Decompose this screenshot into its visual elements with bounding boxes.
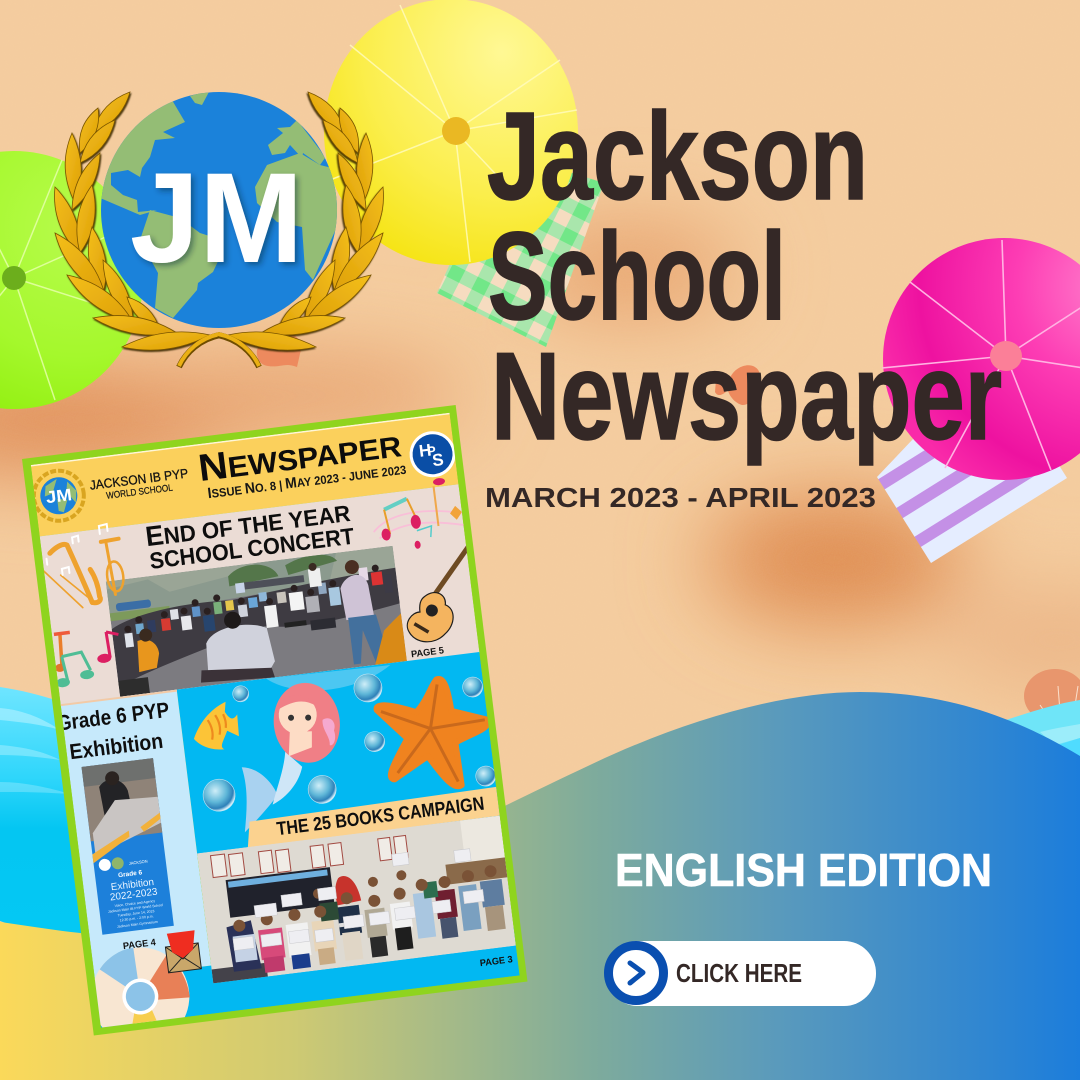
gradient wave: blue to yellow (0, 692, 1080, 1080)
flyer: 2022-2023 (109, 887, 159, 903)
title (487, 88, 1002, 466)
logo initials: JM (130, 147, 303, 290)
globe (100, 90, 340, 328)
flyer: Grade 6 (118, 869, 143, 879)
flyer: Exhibition (110, 877, 155, 893)
cover logo: JM (45, 485, 73, 507)
bubbles (202, 674, 496, 812)
title: Jackson (487, 88, 868, 226)
left cyan wave (0, 687, 110, 945)
newspaper cover (22, 405, 529, 1051)
flyer: JACKSON (128, 859, 148, 866)
flyer (82, 758, 174, 935)
flyer: Jackson Main IB PYP World School (108, 903, 163, 914)
bottom blue strip (95, 928, 520, 1028)
HPS badge (410, 431, 456, 478)
starfish icon (374, 676, 489, 790)
checkered cloth (437, 150, 604, 347)
cover logo (31, 468, 87, 524)
sea panel (177, 652, 500, 854)
exhibition heading (62, 702, 168, 760)
flyer: Voice, Choice and Agency (114, 899, 155, 908)
concert headline: SCHOOL CONCERT (148, 523, 356, 574)
HPS badge: P (426, 443, 437, 459)
edition heading: ENGLISH EDITION (615, 844, 992, 896)
page 5 label: PAGE 5 (411, 645, 445, 660)
concert headline: END OF THE YEAR (144, 496, 352, 552)
flyer: Tuesday, June 14, 2023 (117, 909, 155, 918)
cover header (30, 413, 459, 537)
guitar icon (406, 545, 467, 642)
mermaid icon (242, 682, 340, 832)
banner: 25 books campaign (244, 787, 500, 848)
small fish: centre (715, 365, 760, 405)
exhibition heading: Grade 6 PYP (56, 698, 171, 736)
school name (90, 468, 188, 499)
button: click here: CLICK HERE (676, 958, 802, 988)
flyer: 12:30 p.m. - 2:00 p.m. (119, 914, 154, 922)
photo: school concert (106, 545, 407, 697)
cover masthead: NEWSPAPER (196, 423, 404, 490)
music notes: right icon (373, 478, 464, 549)
banner: 25 books campaign: THE 25 BOOKS CAMPAIGN (275, 794, 485, 840)
school name: JACKSON IB PYP (89, 466, 189, 493)
school name: WORLD SCHOOL (106, 483, 173, 502)
title: School (488, 208, 786, 346)
concert section background (40, 484, 480, 706)
left panel: grade 6 exhibition (55, 690, 211, 981)
small fish: behind wreath (257, 326, 302, 367)
photo: classroom group (197, 816, 516, 983)
striped cloth (877, 400, 1067, 563)
HPS badge: S (431, 450, 445, 470)
fish icon (194, 702, 239, 750)
flyer: Jackson Main Gymnasium (117, 920, 158, 929)
HPS badge: H (418, 440, 432, 461)
page 3 label: PAGE 3 (479, 954, 513, 969)
issue line: ISSUE NO. 8 | MAY 2023 - JUNE 2023 (207, 461, 408, 502)
laurel wreath: left branch (55, 92, 220, 367)
beach ball icon (94, 948, 190, 1028)
music notes: left icon (54, 630, 119, 688)
button: click here (606, 941, 876, 1006)
instruments icon (44, 522, 125, 608)
page 4 label: PAGE 4 (122, 937, 157, 952)
envelope icon (164, 930, 201, 973)
concert headline (146, 506, 354, 568)
school logo: globe with laurel wreath (55, 90, 383, 367)
date line: MARCH 2023 - APRIL 2023 (485, 482, 876, 513)
exhibition heading: Exhibition (68, 729, 164, 764)
laurel wreath: right branch (218, 92, 383, 367)
umbrella: yellow (324, 0, 578, 265)
umbrella: green (0, 151, 143, 409)
umbrella: pink (882, 238, 1080, 480)
right cyan wave with shell (1000, 669, 1080, 800)
